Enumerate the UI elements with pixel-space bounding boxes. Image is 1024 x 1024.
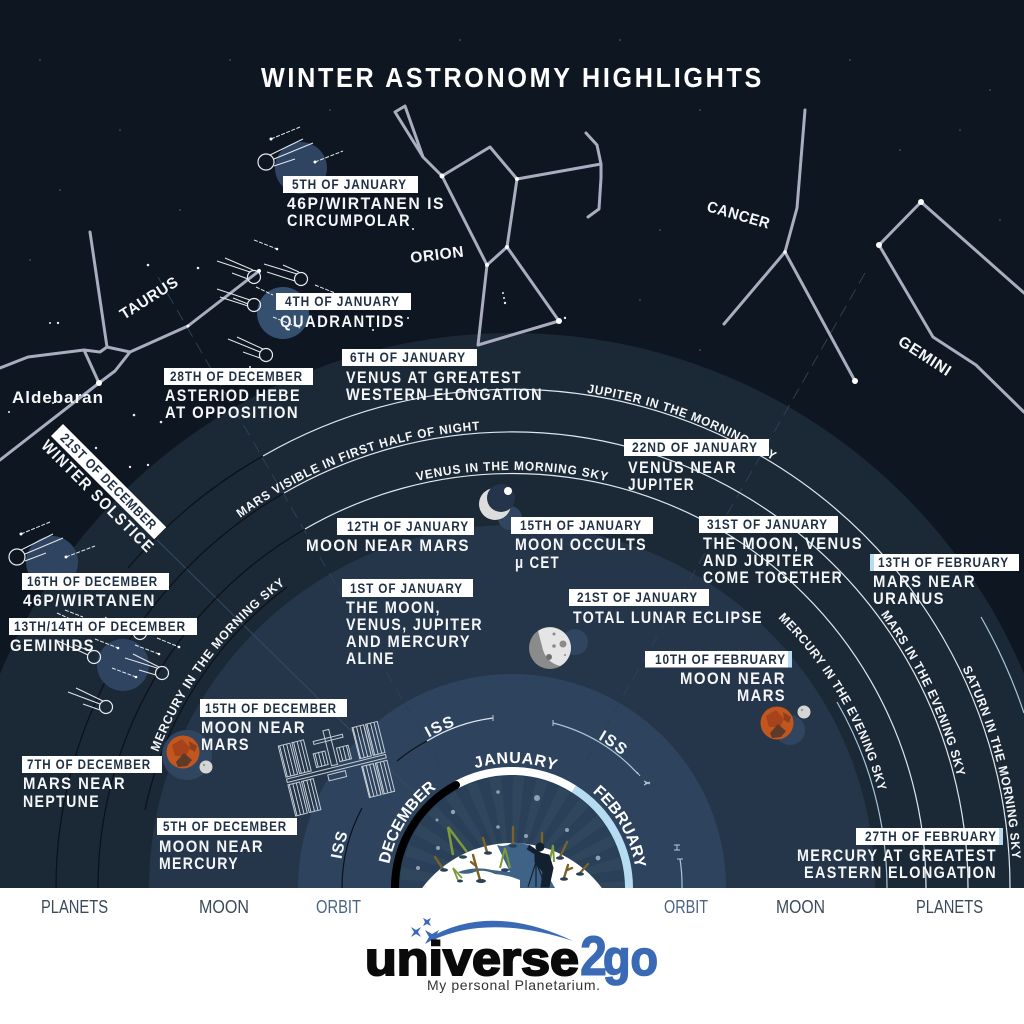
- callout: 28th of December: AT OPPOSITION: [165, 404, 299, 422]
- callout: 31st of January: COME TOGETHER: [703, 569, 843, 587]
- callout: 28th of December: 28TH OF DECEMBER: [170, 369, 303, 384]
- arc label: ISS left: ISS: [330, 832, 347, 858]
- snowflakes: [416, 790, 600, 870]
- callout: 1st of January: 1ST OF JANUARY: [350, 581, 463, 596]
- callout: 10th of February: MOON NEAR: [680, 670, 786, 688]
- callout: 31st of January: 31ST OF JANUARY: [707, 517, 828, 532]
- callout: 6th of January: [342, 349, 543, 404]
- footer label: orbit right: ORBIT: [664, 897, 708, 917]
- callout: 21st of January: [569, 589, 763, 627]
- arc label: Mars visible in first half of night: MARS VISIBLE IN FIRST HALF OF NIGHT: [236, 422, 479, 518]
- callout: 22nd of January: 22ND OF JANUARY: [632, 440, 758, 455]
- orbit tick marks: [493, 715, 683, 859]
- label: Taurus: TAURUS: [117, 274, 182, 323]
- callout: 7th of December: NEPTUNE: [23, 793, 100, 811]
- callout: 27th of February: 27TH OF FEBRUARY: [865, 829, 997, 844]
- constellation: Cancer: [724, 110, 858, 384]
- callout: 1st of January: ALINE: [346, 650, 395, 668]
- callout: 4th of January: 4TH OF JANUARY: [285, 294, 400, 309]
- callout: 15th of December: MARS: [201, 736, 250, 754]
- callout: 4th of January: [276, 293, 411, 331]
- callout: 27th of February: [797, 828, 1003, 882]
- callout: 13th/14th of December: 13TH/14TH OF DECEMBER: [14, 619, 186, 634]
- label: Cancer: CANCER: [705, 199, 772, 233]
- callout: 5th of January: CIRCUMPOLAR: [287, 212, 411, 230]
- callout: 16th of December: 16TH OF DECEMBER: [27, 574, 158, 589]
- pine trees: [448, 827, 554, 880]
- callout: 22nd of January: [624, 439, 769, 494]
- callout: 22nd of January: VENUS NEAR: [628, 459, 737, 477]
- astronomer with telescope: [528, 843, 553, 887]
- footer label: moon right: MOON: [776, 897, 825, 917]
- callout: 13th of February: MARS NEAR: [873, 573, 976, 591]
- bare trees: [435, 827, 588, 880]
- icon: logo swoosh and stars: [411, 918, 573, 944]
- callout: 21st of January: 21ST OF JANUARY: [577, 590, 698, 605]
- callout: 16th of December: [22, 573, 169, 610]
- callout: 22nd of January: JUPITER: [628, 476, 695, 494]
- callout: 15th of January: μ CET: [515, 554, 560, 572]
- footer label: planets right: PLANETS: [916, 897, 983, 917]
- arc label: ISS top left: ISS: [424, 716, 454, 738]
- bright stars: [8, 228, 566, 488]
- icon: International Space Station: [277, 718, 395, 816]
- callout: 13th of February: URANUS: [873, 590, 945, 608]
- callout: 15th of January: [511, 517, 653, 572]
- icon: Mars and Moon, December: [162, 730, 212, 780]
- callout: 15th of December: [200, 699, 347, 754]
- month label: January: JANUARY: [474, 752, 558, 770]
- logo: universe2go: My personal Planetarium.: [427, 977, 600, 993]
- callout: 31st of January: AND JUPITER: [703, 552, 815, 570]
- icon: Geminids meteors: [57, 610, 180, 714]
- callout: 12th of January: MOON NEAR MARS: [306, 537, 470, 555]
- arc label: Venus in the morning sky: VENUS IN THE MORNING SKY: [415, 461, 608, 480]
- arc label: Mars in the evening sky: MARS IN THE EVENING SKY: [881, 610, 966, 774]
- callout: 1st of January: [342, 579, 483, 668]
- callout: 4th of January: QUADRANTIDS: [280, 313, 405, 331]
- month label: December: DECEMBER: [378, 782, 436, 864]
- callout: 1st of January: AND MERCURY: [346, 633, 471, 651]
- icon: total lunar eclipse Moon: [529, 627, 588, 669]
- logo: universe2go: [365, 918, 658, 993]
- icon: comet 5th January: [258, 127, 343, 194]
- callout: 5th of January: [283, 176, 445, 230]
- callout: 13th of February: [870, 554, 1019, 608]
- callout: 5th of December: MOON NEAR: [159, 838, 264, 856]
- footer label: planets left: PLANETS: [41, 897, 108, 917]
- callout: 6th of January: WESTERN ELONGATION: [346, 386, 543, 404]
- arc label: Mercury in the evening sky: MERCURY IN THE EVENING SKY: [778, 612, 887, 788]
- callout: 12th of January: [306, 518, 474, 555]
- month ring: [395, 771, 629, 888]
- snowy ground: [422, 843, 602, 888]
- callout: 27th of February: EASTERN ELONGATION: [804, 864, 997, 882]
- callout: 7th of December: MARS NEAR: [23, 775, 126, 793]
- icon: Moon occulting mu Ceti: [479, 484, 522, 530]
- tree shadows: [440, 844, 584, 883]
- callout: 7th of December: 7TH OF DECEMBER: [27, 757, 151, 772]
- callout: 16th of December: 46P/WIRTANEN: [23, 592, 156, 610]
- scene: Earth horizon with sky rays: [416, 790, 602, 888]
- radial date guide lines: [157, 273, 865, 818]
- callout: 21st of December, winter solstice: WINTER SOLSTICE: [38, 437, 158, 557]
- callout: 12th of January: 12TH OF JANUARY: [347, 519, 469, 534]
- footer label: moon left: MOON: [199, 897, 249, 917]
- callout: 1st of January: VENUS, JUPITER: [346, 616, 483, 634]
- callout: 15th of December: 15TH OF DECEMBER: [205, 701, 337, 716]
- visibility arcs: [56, 389, 1024, 888]
- callout: 27th of February: MERCURY AT GREATEST: [797, 847, 997, 865]
- callout: 15th of December: MOON NEAR: [201, 719, 306, 737]
- arc label: Saturn in the morning sky: SATURN IN THE MORNING SKY: [963, 666, 1021, 858]
- callout: 10th of February: [645, 651, 792, 705]
- icon: comet 16th December: [9, 522, 95, 588]
- arc label: ISS top right: ISS: [598, 730, 627, 754]
- logo: universe2go: go: [603, 932, 658, 986]
- arc label: Mercury in the morning sky: MERCURY IN THE MORNING SKY: [150, 578, 283, 752]
- callout: 31st of January: THE MOON, VENUS: [703, 535, 863, 553]
- callout: 31st of January: [699, 516, 863, 587]
- callout: 5th of December: [157, 818, 297, 873]
- icon: Quadrantids meteors: [217, 240, 335, 362]
- logo: universe2go: 2: [580, 924, 607, 987]
- constellation: Orion: [395, 106, 601, 345]
- footer label: orbit left: ORBIT: [316, 897, 361, 917]
- callout: 15th of January: 15TH OF JANUARY: [520, 518, 642, 533]
- callout: 6th of January: 6TH OF JANUARY: [350, 350, 466, 365]
- callout: 21st of December, winter solstice: 21ST OF DECEMBER: [57, 430, 160, 533]
- logo: universe2go: universe: [365, 932, 579, 985]
- constellation: Taurus: [0, 232, 261, 460]
- callout: 5th of January: 5TH OF JANUARY: [292, 177, 407, 192]
- icon: Mars and Moon, February: [760, 706, 810, 745]
- label: Aldebaran: Aldebaran: [12, 388, 104, 407]
- title: WINTER ASTRONOMY HIGHLIGHTS: [261, 62, 764, 93]
- callout: 6th of January: VENUS AT GREATEST: [346, 369, 522, 387]
- arc label: Jupiter in the morning sky: JUPITER IN THE MORNING SKY: [587, 384, 778, 459]
- callout: 28th of December: [164, 368, 313, 422]
- callout: 5th of January: 46P/WIRTANEN IS: [287, 195, 445, 213]
- callout: 15th of January: MOON OCCULTS: [515, 536, 647, 554]
- label: Orion: ORION: [409, 244, 465, 267]
- callout: 10th of February: 10TH OF FEBRUARY: [655, 652, 786, 667]
- label: Gemini: GEMINI: [895, 333, 954, 380]
- concentric bands: planets, moon, orbit: [0, 333, 1024, 888]
- callout: 5th of December: 5TH OF DECEMBER: [163, 819, 287, 834]
- sky rays: [431, 809, 432, 810]
- callout: 13th of February: 13TH OF FEBRUARY: [878, 555, 1009, 570]
- callout: 21st of January: TOTAL LUNAR ECLIPSE: [573, 609, 763, 627]
- footer panel: [0, 888, 1024, 1024]
- callout: 1st of January: THE MOON,: [346, 599, 441, 617]
- faint background stars: [29, 39, 1001, 351]
- callout: 5th of December: MERCURY: [159, 855, 239, 873]
- callout: 7th of December: [22, 756, 162, 811]
- callout: 13th/14th of December: [9, 618, 197, 655]
- callout: 10th of February: MARS: [737, 687, 786, 705]
- month label: February: FEBRUARY: [593, 784, 646, 866]
- callout: 13th/14th of December: GEMINIDS: [10, 637, 95, 655]
- callout: 28th of December: ASTERIOD HEBE: [165, 387, 301, 405]
- constellation: Gemini: [876, 199, 1024, 412]
- ground shadow: [458, 842, 555, 888]
